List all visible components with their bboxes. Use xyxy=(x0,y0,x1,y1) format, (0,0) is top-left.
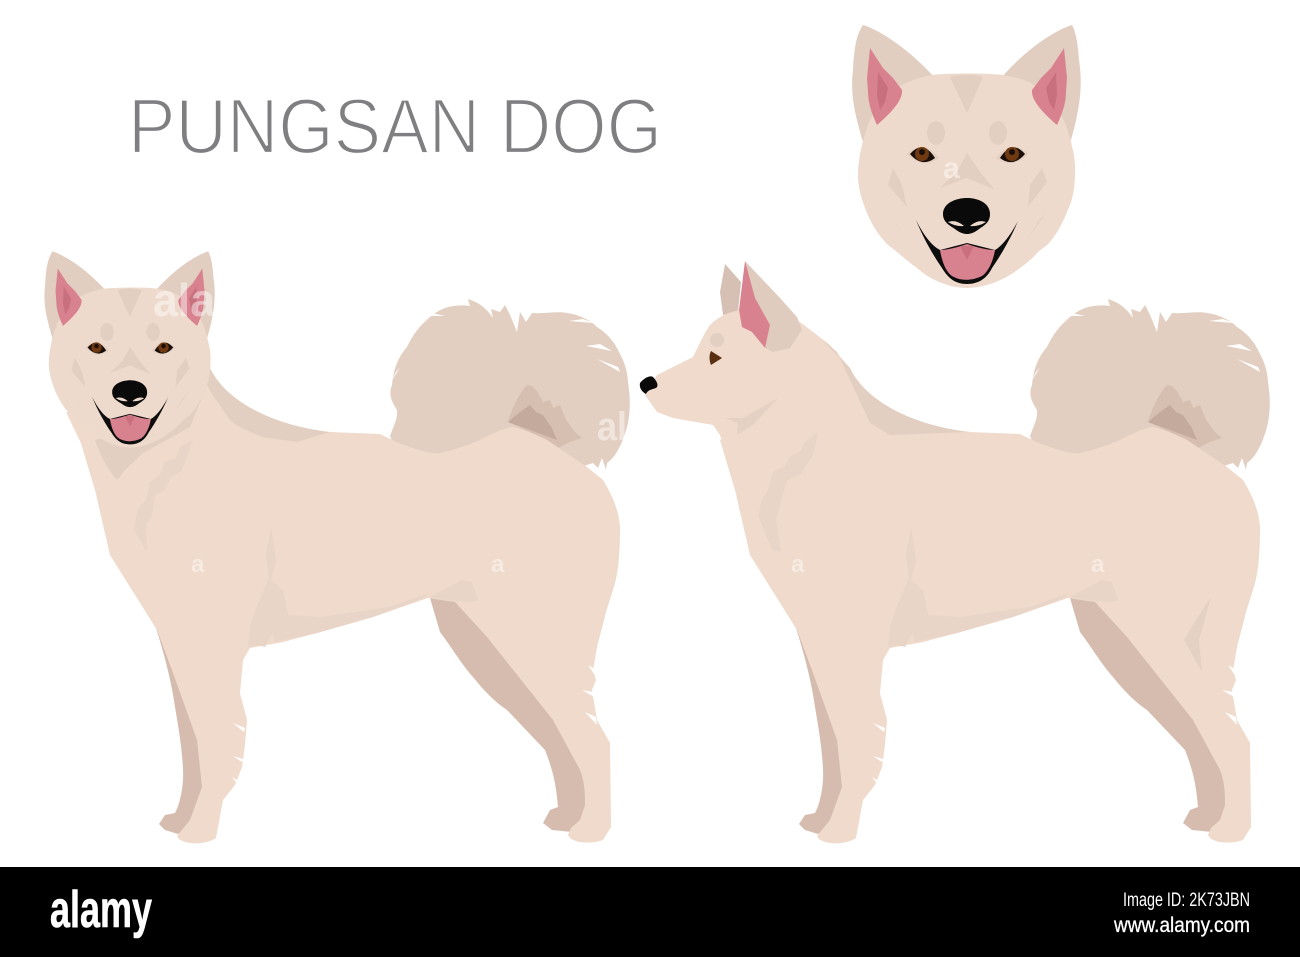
near ear xyxy=(745,261,802,352)
inner ear xyxy=(739,261,770,348)
website: www.alamy.com xyxy=(1113,914,1250,937)
body, tail and legs xyxy=(720,299,1270,843)
watermark: a xyxy=(191,551,205,578)
chest shadow xyxy=(95,385,207,480)
chest fur streak xyxy=(758,432,818,552)
watermark: a xyxy=(791,551,805,578)
chest fur streak xyxy=(134,440,193,552)
head xyxy=(44,251,215,447)
head portrait xyxy=(852,25,1081,288)
neck shadow xyxy=(207,368,330,442)
eye xyxy=(710,351,722,365)
logo: alamy xyxy=(50,881,152,939)
watermark: a xyxy=(1091,551,1105,578)
watermark xyxy=(153,152,1105,578)
nose xyxy=(640,376,657,394)
ruff under head xyxy=(66,412,110,447)
neck shadow xyxy=(822,340,970,435)
body, tail and legs xyxy=(80,299,630,843)
dog left: front-facing pose xyxy=(44,251,630,843)
far ear xyxy=(720,264,741,315)
forehead spot xyxy=(710,333,724,347)
image id: Image ID: 2K73JBN xyxy=(1123,890,1250,911)
footer bar xyxy=(0,867,1300,957)
watermark: ala xyxy=(153,274,215,326)
dog right: profile pose xyxy=(640,261,1270,843)
thigh fur streak xyxy=(1184,597,1211,672)
watermark: a xyxy=(943,152,960,185)
title: PUNGSAN DOG xyxy=(128,82,662,170)
watermark: al xyxy=(597,405,627,449)
watermark: a xyxy=(491,551,505,578)
head and neck xyxy=(645,310,870,520)
neck fur streak xyxy=(725,398,778,435)
